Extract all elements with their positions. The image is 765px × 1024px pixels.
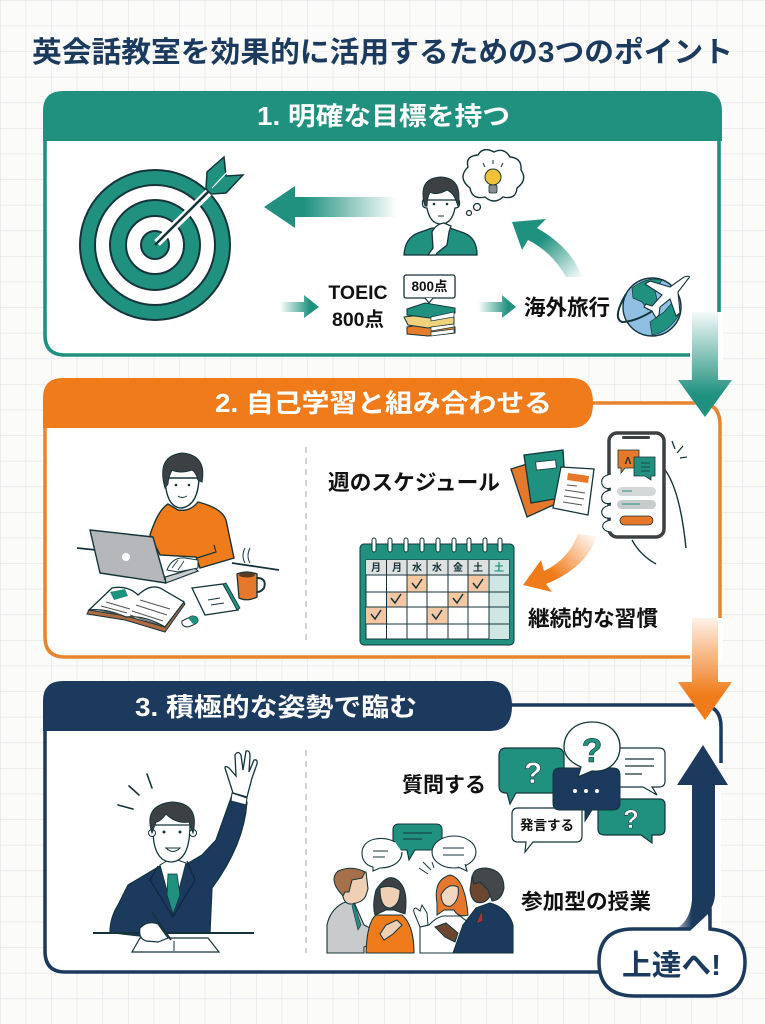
icon: weekly calendar: 土 bbox=[473, 561, 483, 574]
icon: books with 800 score bbox=[404, 275, 455, 336]
arrow: to TOEIC bbox=[280, 295, 319, 318]
icon: question speech bubbles: 発言する bbox=[520, 818, 574, 833]
icon: thinking person bbox=[404, 177, 477, 255]
icon: question speech bubbles: ? bbox=[582, 732, 602, 770]
heading 3 bbox=[43, 681, 512, 731]
icon: weekly calendar bbox=[360, 538, 514, 645]
heading 1 bbox=[43, 91, 722, 141]
icon: group discussion bbox=[327, 824, 513, 953]
text: TOEIC 800点 bbox=[328, 282, 388, 331]
text: weekly schedule: 週のスケジュール bbox=[328, 471, 500, 495]
text: TOEIC 800点: 800点 bbox=[332, 309, 384, 331]
divider: panel 2 bbox=[305, 447, 307, 640]
callout: improve: 上達へ! bbox=[622, 949, 721, 982]
panel body 1 bbox=[45, 120, 719, 355]
icon: books with 800 score: 800点 bbox=[411, 279, 448, 294]
panel: 3 active attitude bbox=[43, 681, 724, 973]
icon: weekly calendar: 月 bbox=[371, 562, 381, 574]
text: ask questions: 質問する bbox=[402, 774, 486, 797]
text: continued habit: 継続的な習慣 bbox=[528, 607, 658, 631]
panel: 1 goals bbox=[43, 91, 722, 355]
arrow: to travel bbox=[478, 295, 516, 318]
callout: improve bbox=[599, 912, 745, 996]
arrow: to target bbox=[264, 186, 397, 228]
text: TOEIC 800点: TOEIC bbox=[328, 282, 388, 304]
icon: smartphone in hand bbox=[602, 433, 687, 564]
panel body 3 bbox=[45, 705, 724, 973]
arrow: curved to person bbox=[512, 219, 582, 277]
heading 3: 3. 積極的な姿勢で臨む bbox=[135, 694, 417, 722]
arrow: navy upward flow bbox=[670, 745, 728, 931]
panel body 2 bbox=[45, 403, 720, 657]
icon: question speech bubbles bbox=[499, 722, 665, 852]
icon: student raising hand bbox=[93, 751, 257, 952]
heading 1: 1. 明確な目標を持つ bbox=[257, 103, 510, 131]
icon: weekly calendar: 金 bbox=[453, 561, 463, 574]
icon: weekly calendar: 水 bbox=[432, 561, 442, 574]
heading 2 bbox=[43, 378, 593, 428]
title: 英会話教室を効果的に活用するための3つのポイント bbox=[32, 36, 733, 69]
arrow: teal down flow bbox=[678, 312, 732, 417]
heading 2: 2. 自己学習と組み合わせる bbox=[215, 390, 552, 418]
icon: textbooks bbox=[511, 450, 594, 517]
icon: question speech bubbles: ? bbox=[524, 757, 542, 790]
icon: weekly calendar: 水 bbox=[412, 561, 422, 574]
icon: question speech bubbles: ? bbox=[623, 804, 639, 834]
icon: weekly calendar: 土 bbox=[494, 561, 504, 574]
icon: weekly calendar: 月 bbox=[392, 562, 402, 574]
icon: target with arrow bbox=[80, 157, 243, 320]
icon: globe with airplane bbox=[618, 276, 689, 336]
divider: panel 3 bbox=[305, 750, 307, 953]
text: overseas travel: 海外旅行 bbox=[524, 296, 610, 320]
icon: smartphone in hand: Λ bbox=[625, 456, 632, 467]
arrow: curved to calendar bbox=[523, 534, 597, 592]
panel: 2 self study bbox=[43, 378, 720, 657]
text: participatory class: 参加型の授業 bbox=[521, 890, 651, 914]
icon: thought bubble with bulb bbox=[463, 150, 524, 216]
arrow: orange down flow bbox=[678, 618, 732, 720]
icon: person studying at laptop bbox=[77, 453, 279, 632]
